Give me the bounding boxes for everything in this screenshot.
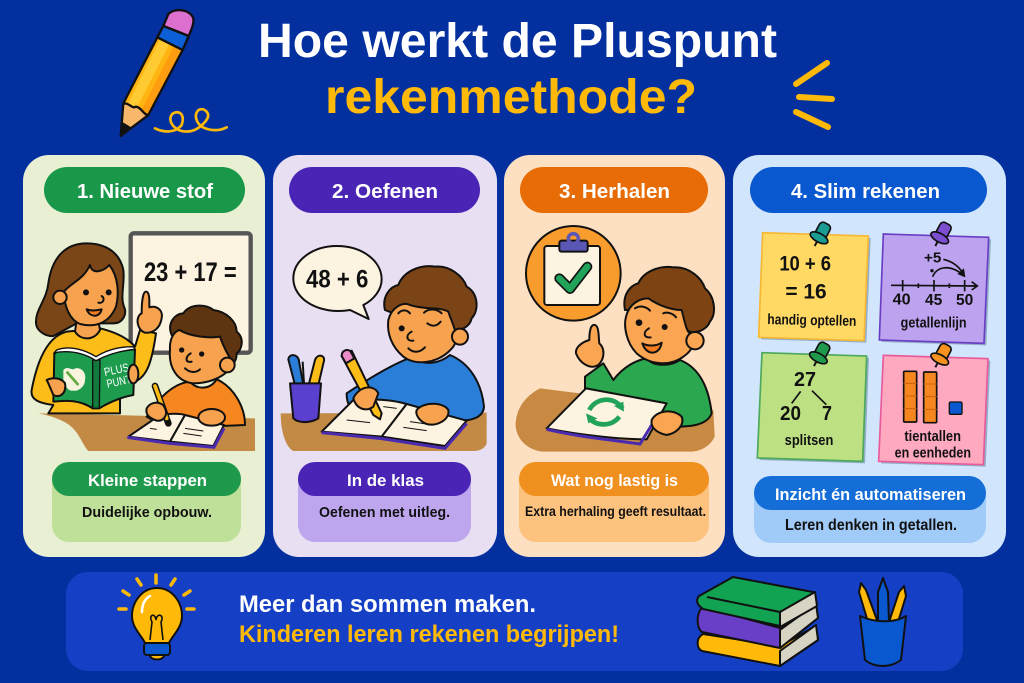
sticky note: getallenlijn — [879, 234, 991, 345]
heading: 4. Slim rekenen — [750, 167, 987, 213]
sticky note: splitsen — [757, 353, 869, 463]
callout: Kleine stappen — [52, 462, 241, 542]
callout: Wat nog lastig is — [519, 462, 709, 542]
sticky note: handig optellen: 10 + 6 — [779, 252, 831, 276]
icon: pencil with scribble — [121, 10, 227, 136]
title — [258, 15, 777, 124]
callout: In de klas — [298, 462, 471, 542]
text block: footer message — [239, 591, 619, 648]
icon: sparkle lines — [796, 63, 832, 127]
text block: footer message: Meer dan sommen maken. — [239, 591, 536, 618]
title: rekenmethode? — [325, 71, 697, 124]
icon: stack of books — [697, 577, 818, 666]
callout: Kleine stappen: Duidelijke opbouw. — [82, 504, 212, 521]
heading: 2. Oefenen — [289, 167, 480, 213]
illustration: teacher and child: PLUS — [103, 361, 130, 379]
heading: 1. Nieuwe stof — [44, 167, 245, 213]
sticky note: getallenlijn: 40 — [893, 292, 911, 309]
icon: green pin — [805, 339, 834, 371]
sticky note: splitsen: 7 — [822, 403, 832, 425]
title: Hoe werkt de Pluspunt — [258, 15, 777, 68]
sticky note: splitsen: 20 — [780, 403, 801, 425]
sticky note: tientallen en eenheden — [879, 355, 990, 467]
illustration: boy practising: 48 + 6 — [306, 266, 368, 293]
panel: 2. Oefenen — [273, 155, 497, 557]
callout: Kleine stappen: Kleine stappen — [88, 471, 207, 490]
icon: purple pin — [927, 219, 956, 251]
sticky note: tientallen en eenheden: tientallen — [904, 429, 961, 445]
panel: footer banner — [66, 572, 963, 671]
illustration: boy practising — [281, 246, 487, 451]
sticky note: getallenlijn: 45 — [925, 292, 943, 309]
icon: pencil cup — [859, 578, 906, 666]
icon: light bulb — [119, 575, 194, 660]
panel: 3. Herhalen — [504, 155, 725, 557]
heading: 1. Nieuwe stof: 1. Nieuwe stof — [77, 180, 213, 203]
illustration: teacher and child: 23 + 17 = — [144, 257, 237, 287]
callout: In de klas: In de klas — [347, 471, 424, 490]
heading: 3. Herhalen: 3. Herhalen — [559, 180, 670, 203]
heading: 2. Oefenen: 2. Oefenen — [332, 180, 438, 203]
illustration: teacher and child: PUNT — [105, 373, 133, 391]
icon: orange pin — [927, 340, 956, 372]
sticky note: splitsen: splitsen — [785, 433, 833, 449]
sticky note: handig optellen: = 16 — [785, 279, 827, 303]
sticky note: getallenlijn: 50 — [956, 292, 973, 309]
heading: 3. Herhalen — [520, 167, 708, 213]
panel: 4. Slim rekenen — [733, 155, 1006, 557]
sticky note: getallenlijn: +5 — [924, 251, 941, 267]
heading: 4. Slim rekenen: 4. Slim rekenen — [791, 180, 940, 203]
callout: Inzicht én automatiseren: Inzicht én automatiseren — [775, 486, 966, 504]
text block: footer message: Kinderen leren rekenen begrijpen! — [239, 621, 619, 648]
panel: 1. Nieuwe stof — [23, 155, 265, 557]
sticky note: handig optellen — [759, 233, 871, 343]
callout: Wat nog lastig is: Extra herhaling geeft resultaat. — [525, 504, 706, 519]
sticky note: getallenlijn: getallenlijn — [901, 315, 967, 331]
sticky note: handig optellen: handig optellen — [767, 312, 857, 330]
callout: Wat nog lastig is: Wat nog lastig is — [551, 471, 678, 490]
sticky note: splitsen: 27 — [794, 369, 816, 391]
icon: teal pin — [806, 219, 835, 251]
illustration: teacher and child — [31, 233, 255, 451]
callout: Inzicht én automatiseren: Leren denken in getallen. — [785, 517, 957, 534]
callout: Inzicht én automatiseren — [754, 476, 986, 543]
sticky note: tientallen en eenheden: en eenheden — [895, 445, 971, 461]
illustration: boy with clipboard — [516, 226, 715, 452]
callout: In de klas: Oefenen met uitleg. — [319, 504, 450, 521]
